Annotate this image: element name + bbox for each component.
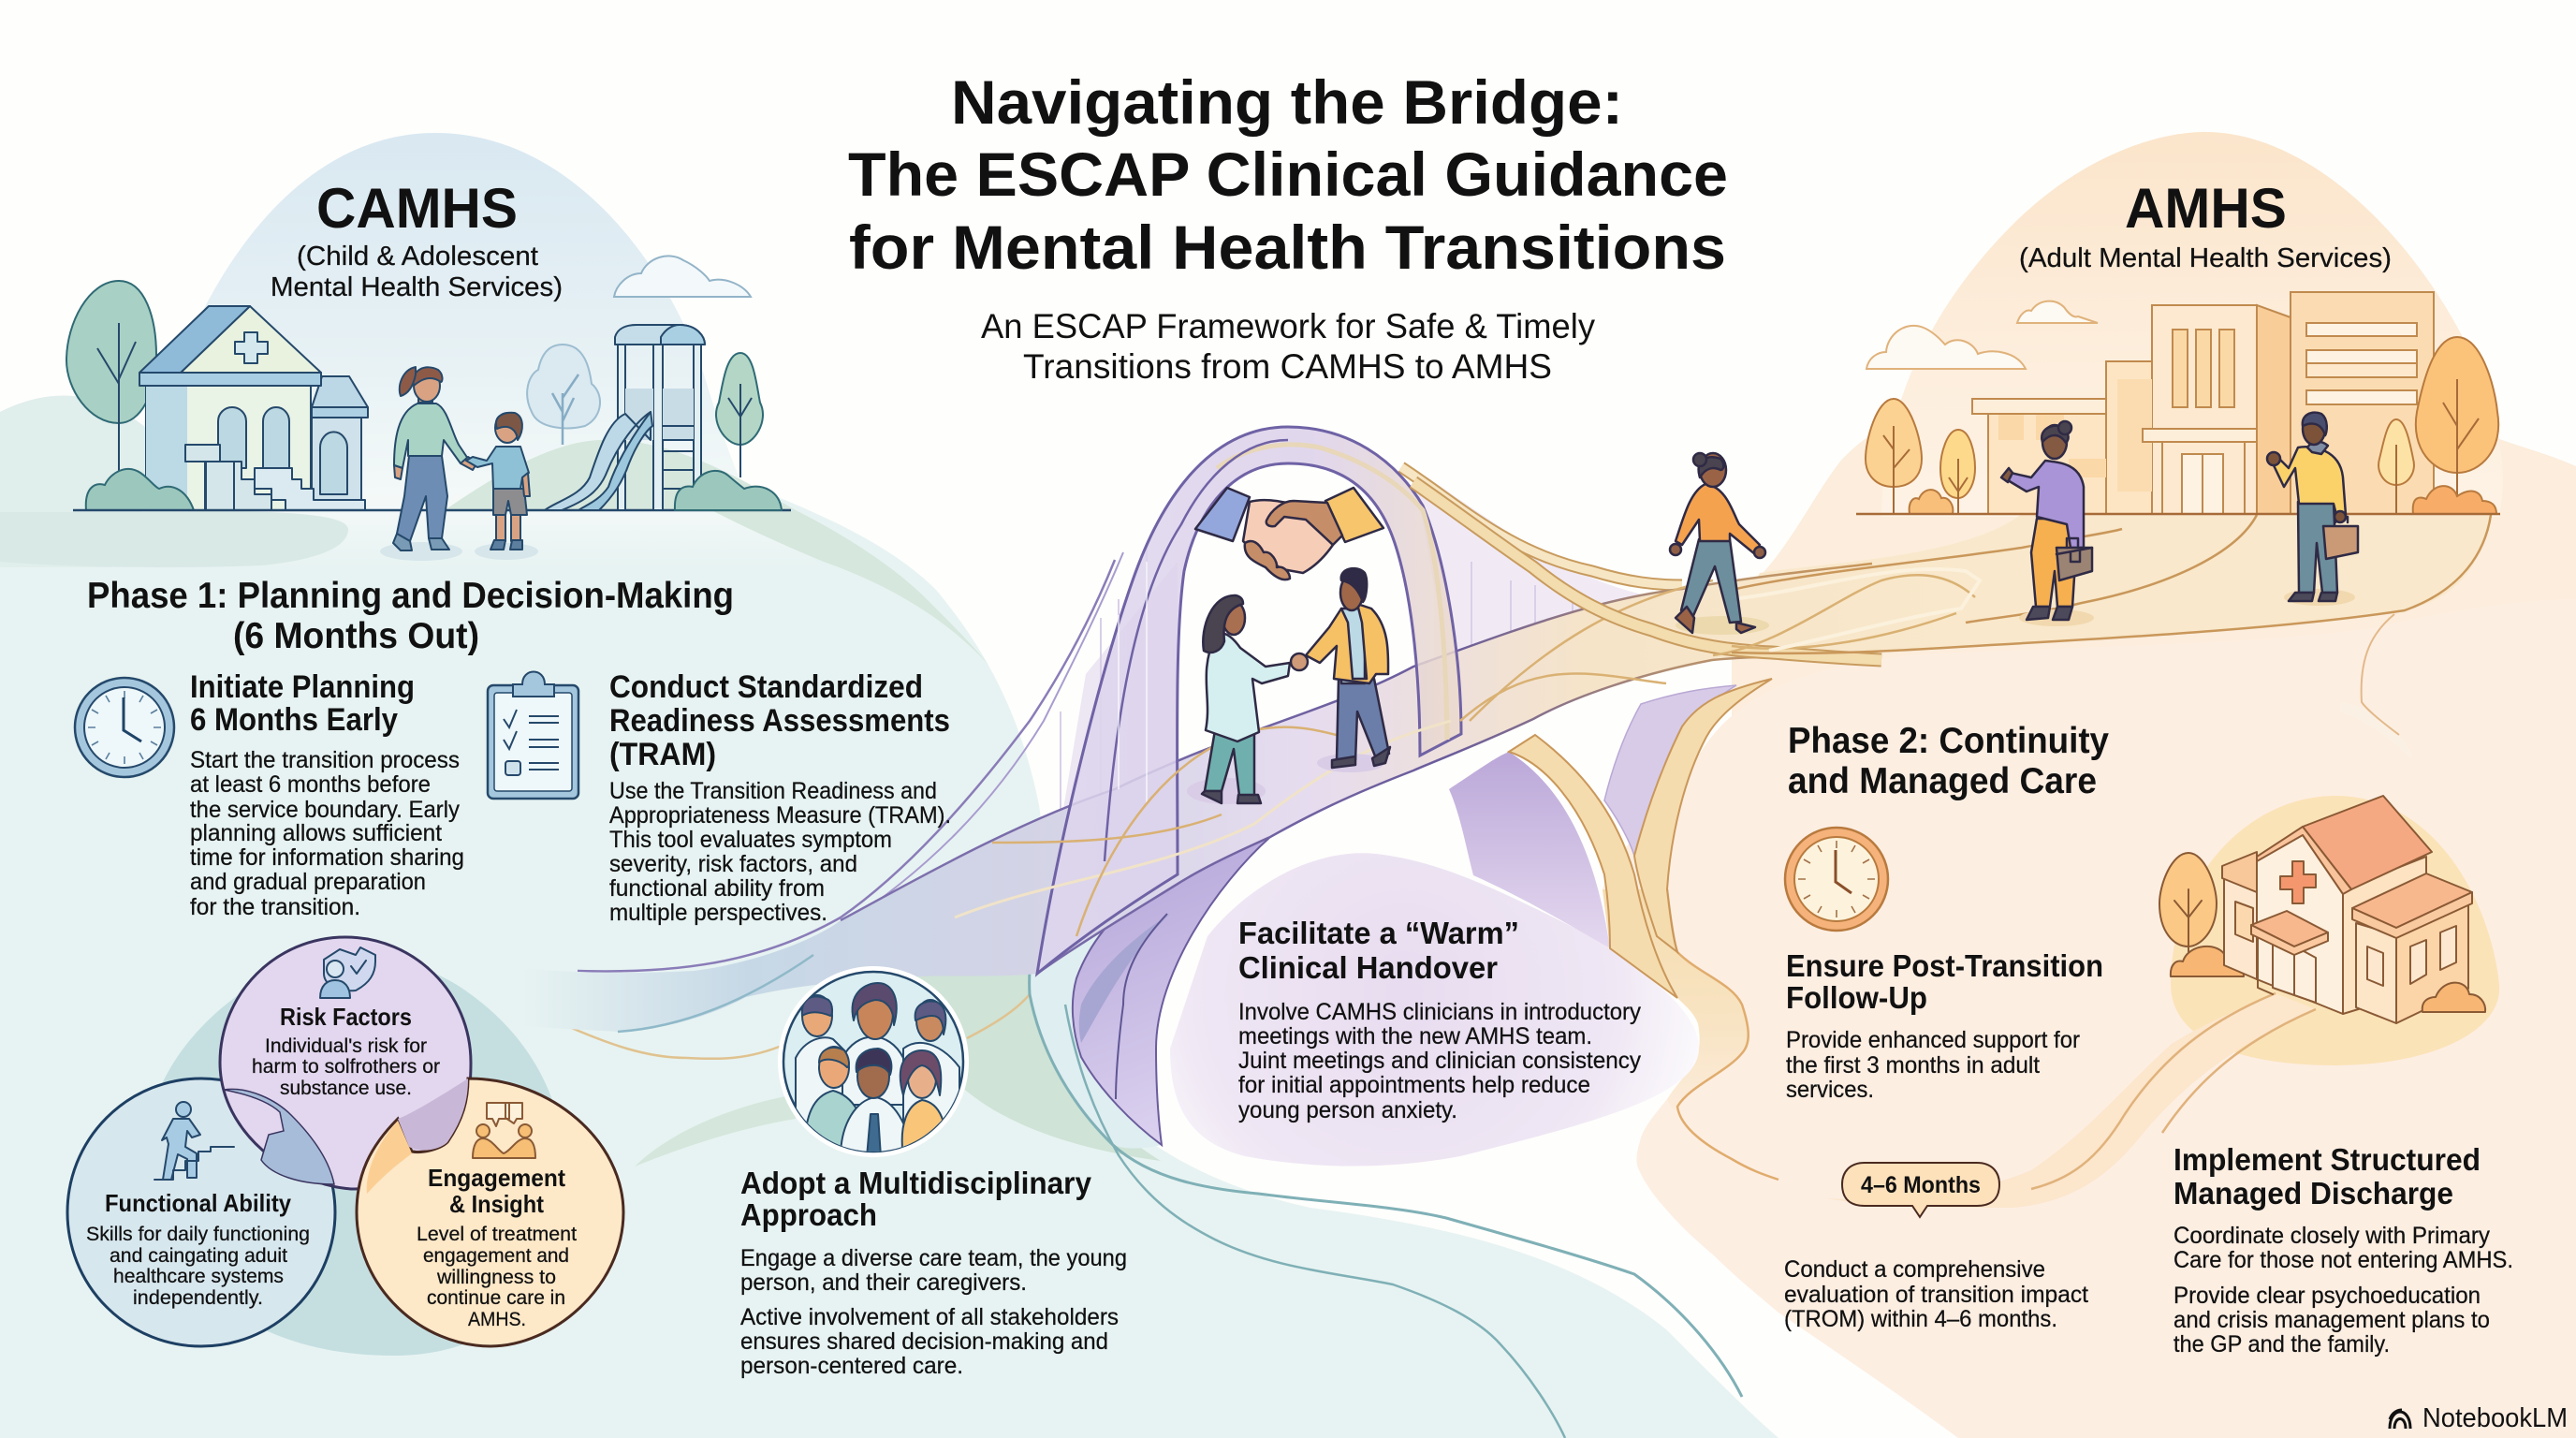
text block: post-transition follow-up: Ensure Post-Transition — [1786, 948, 2103, 983]
text block: managed discharge: the GP and the family. — [2174, 1331, 2390, 1357]
panel: AMHS warm background — [1603, 412, 2576, 1438]
wave of gold inside warm panel — [1603, 889, 1749, 1109]
heading: Phase 1: (6 Months Out) — [233, 616, 479, 656]
icon: ground line — [73, 509, 791, 511]
title: The ESCAP Clinical Guidance — [848, 139, 1728, 209]
panel: functional ability circle — [67, 1078, 335, 1346]
text: functional ability: Skills for daily functioning — [86, 1224, 310, 1245]
bridge: front cable, warm flowing lines and arrow — [1413, 482, 2491, 660]
figure: child — [466, 413, 538, 560]
path outline — [2031, 993, 2316, 1189]
heading: CAMHS: CAMHS — [316, 177, 518, 240]
text: engagement and insight: willingness to — [436, 1267, 556, 1288]
icon: bush right — [675, 471, 782, 510]
subtitle — [981, 307, 1595, 386]
text: risk factors — [252, 1003, 440, 1099]
callout: 4-6 months: 4–6 Months — [1861, 1172, 1981, 1198]
text block: readiness assessments: Appropriateness Measure (TRAM). — [609, 802, 951, 829]
subtitle: Transitions from CAMHS to AMHS — [1023, 347, 1552, 386]
heading: AMHS: (Adult Mental Health Services) — [2019, 243, 2392, 273]
text block: warm clinical handover: Facilitate a “Warm” — [1238, 916, 1519, 950]
ribbons behind the bridge — [567, 899, 1161, 1167]
text block: warm clinical handover: Involve CAMHS clinicians in introductory — [1238, 999, 1641, 1025]
text block: initiate planning: Start the transition process — [190, 747, 460, 773]
heading: Phase 1: Phase 1: Planning and Decision-Making — [87, 576, 734, 616]
icon: tree left — [66, 281, 156, 510]
icon: person on stairs — [154, 1102, 234, 1180]
icon: hospital — [2159, 796, 2485, 1023]
text block: initiate planning: time for information sharing — [190, 844, 464, 871]
icon: autumn trees — [1866, 337, 2498, 514]
text: engagement and insight: & Insight — [449, 1190, 544, 1218]
text: risk factors: Individual's risk for — [265, 1035, 427, 1057]
heading: CAMHS: (Child & Adolescent — [297, 242, 538, 271]
text: risk factors: substance use. — [280, 1078, 412, 1099]
text: engagement and insight: Engagement — [428, 1164, 565, 1192]
icon: bush left — [86, 469, 194, 510]
text: functional ability — [86, 1189, 310, 1309]
text block: readiness assessments: (TRAM) — [609, 737, 716, 772]
icon: clinic building — [139, 306, 368, 510]
bridge: hanger lines and fill — [1039, 467, 1685, 955]
text block: managed discharge: and crisis management plans to — [2174, 1307, 2490, 1333]
text block: initiate planning: and gradual preparation — [190, 869, 426, 895]
text block: readiness assessments: multiple perspectives. — [609, 900, 827, 926]
text block: transition evaluation — [1784, 1256, 2088, 1332]
figure: clinician colleague — [1291, 568, 1390, 772]
text: functional ability: and caingating aduit — [110, 1245, 287, 1267]
text block: post-transition follow-up: the first 3 months in adult — [1786, 1052, 2040, 1078]
panel: warm handover blob — [1170, 853, 1699, 1167]
illustration: AMHS scene — [1856, 292, 2500, 626]
text block: initiate planning: the service boundary. Early — [190, 797, 460, 823]
icon: pale tree — [527, 345, 600, 445]
text block: initiate planning: planning allows sufficient — [190, 820, 442, 846]
text block: managed discharge: Implement Structured — [2174, 1142, 2481, 1177]
bridge: warm arcs below — [1449, 679, 1772, 998]
path from hospital — [1825, 993, 2316, 1208]
icon: ground line — [1856, 513, 2500, 515]
text block: initiate planning: Initiate Planning — [190, 669, 415, 705]
heading: CAMHS: Mental Health Services) — [271, 272, 563, 302]
text block: warm clinical handover — [1238, 916, 1641, 1123]
title — [848, 67, 1728, 282]
logo: NotebookLM: NotebookLM — [2422, 1403, 2568, 1433]
heading: AMHS: AMHS — [2125, 177, 2287, 240]
icon: blue clock — [75, 678, 174, 777]
panel: engagement circle — [357, 1078, 623, 1346]
text block: warm clinical handover: young person anxiety. — [1238, 1097, 1457, 1123]
text block: transition evaluation: evaluation of transition impact — [1784, 1282, 2088, 1308]
text: functional ability: healthcare systems — [113, 1266, 284, 1287]
hospital backdrop — [2171, 796, 2499, 1065]
text block: multidisciplinary approach: person, and their caregivers. — [740, 1269, 1027, 1296]
text: risk factors: Risk Factors — [280, 1003, 412, 1031]
text block: readiness assessments — [609, 669, 951, 926]
icon: multidisciplinary team — [778, 966, 969, 1157]
title: Navigating the Bridge: — [951, 67, 1623, 137]
text block: post-transition follow-up — [1786, 948, 2103, 1103]
figure: clinician — [1187, 595, 1290, 804]
panel: risk factors circle — [220, 937, 471, 1189]
panel: CAMHS teal background — [0, 396, 1778, 1438]
text: engagement and insight: continue care in — [427, 1287, 565, 1309]
text block: multidisciplinary approach: person-centered care. — [740, 1353, 963, 1379]
text block: readiness assessments: severity, risk factors, and — [609, 851, 857, 877]
text block: readiness assessments: This tool evaluates symptom — [609, 827, 892, 853]
text block: readiness assessments: Conduct Standardized — [609, 669, 923, 705]
text block: readiness assessments: Readiness Assessments — [609, 703, 950, 739]
heading: Phase 2: Phase 2: Continuity — [1788, 721, 2109, 761]
heading: Phase 1 — [87, 576, 734, 656]
bridge: purple swoops — [1030, 837, 1742, 1438]
text block: managed discharge: Managed Discharge — [2174, 1176, 2453, 1211]
text block: multidisciplinary approach: Adopt a Multidisciplinary — [740, 1166, 1092, 1200]
venn overlap: orange accent — [367, 1121, 412, 1194]
heading: Phase 2: and Managed Care — [1788, 761, 2097, 801]
heading: CAMHS — [271, 177, 563, 302]
icon: handshake — [1195, 488, 1383, 580]
icon: people talking — [473, 1103, 535, 1158]
text block: transition evaluation: Conduct a comprehensive — [1784, 1256, 2045, 1283]
illustration: CAMHS scene — [66, 256, 791, 561]
text block: multidisciplinary approach — [740, 1166, 1127, 1379]
icon: playground — [545, 325, 705, 510]
icon: right tree — [716, 353, 763, 477]
text block: warm clinical handover: meetings with the new AMHS team. — [1238, 1023, 1592, 1049]
panel: AMHS hill — [1881, 132, 2503, 517]
text: engagement and insight: engagement and — [423, 1245, 569, 1267]
bridge: deck — [522, 529, 2122, 1032]
text block: warm clinical handover: Juint meetings and clinician consistency — [1238, 1048, 1641, 1074]
icon: clouds — [1866, 301, 2098, 369]
chart: readiness domains venn — [67, 937, 623, 1356]
text block: transition evaluation: (TROM) within 4–6 months. — [1784, 1306, 2057, 1332]
title: for Mental Health Transitions — [849, 213, 1726, 282]
text block: managed discharge: Coordinate closely with Primary — [2174, 1223, 2490, 1249]
text block: readiness assessments: functional ability from — [609, 875, 825, 902]
path fill: amhs ground — [1741, 514, 2491, 653]
text: engagement and insight: AMHS. — [468, 1309, 526, 1330]
text block: managed discharge: Care for those not entering AMHS. — [2174, 1247, 2513, 1273]
text: engagement and insight — [417, 1164, 577, 1330]
icon: hospital towers — [1972, 292, 2434, 514]
venn overlap: purple and orange — [398, 1078, 468, 1151]
icon: person and shield — [320, 947, 375, 998]
bridge: arch — [955, 427, 1713, 974]
green hill band — [0, 440, 988, 665]
text block: post-transition follow-up: Provide enhanced support for — [1786, 1027, 2080, 1053]
figure: man with case — [2267, 413, 2358, 606]
text block: managed discharge — [2174, 1142, 2513, 1357]
bridge: thin cables to the left — [578, 552, 1123, 971]
text block: multidisciplinary approach: Engage a diverse care team, the young — [740, 1245, 1127, 1271]
figure: walking person — [1670, 453, 1769, 635]
text block: initiate planning: 6 Months Early — [190, 702, 398, 738]
decorative path and hospital illustration — [1825, 796, 2499, 1208]
text block: post-transition follow-up: services. — [1786, 1077, 1874, 1103]
heading: Phase 2 — [1788, 721, 2109, 801]
text block: multidisciplinary approach: Approach — [740, 1197, 877, 1232]
figure: mother — [380, 367, 477, 561]
figure: woman with briefcase — [2001, 421, 2094, 626]
text block: multidisciplinary approach: Active involvement of all stakeholders — [740, 1304, 1119, 1330]
text block: multidisciplinary approach: ensures shared decision-making and — [740, 1328, 1108, 1355]
icon: cloud — [614, 256, 751, 297]
text block: initiate planning — [190, 669, 464, 920]
text block: managed discharge: Provide clear psychoeducation — [2174, 1283, 2481, 1309]
text: functional ability: independently. — [133, 1287, 263, 1309]
panel: CAMHS hill — [112, 133, 824, 567]
text block: readiness assessments: Use the Transition Readiness and — [609, 778, 937, 804]
text block: initiate planning: at least 6 months before — [190, 771, 431, 798]
text: functional ability: Functional Ability — [105, 1189, 291, 1217]
heading: AMHS — [2019, 177, 2392, 273]
text block: post-transition follow-up: Follow-Up — [1786, 980, 1927, 1015]
venn overlap: blue and purple — [224, 1089, 334, 1184]
text block: warm clinical handover: Clinical Handover — [1238, 950, 1498, 985]
icon: orange clock — [1785, 828, 1888, 931]
text: engagement and insight: Level of treatment — [417, 1224, 577, 1245]
venn backdrop — [143, 956, 567, 1356]
text block: initiate planning: for the transition. — [190, 894, 360, 920]
icon: clipboard — [488, 672, 578, 799]
subtitle: An ESCAP Framework for Safe & Timely — [981, 307, 1595, 345]
text: risk factors: harm to solfrothers or — [252, 1056, 440, 1078]
text block: warm clinical handover: for initial appointments help reduce — [1238, 1072, 1590, 1098]
callout: 4-6 months — [1842, 1163, 1999, 1217]
